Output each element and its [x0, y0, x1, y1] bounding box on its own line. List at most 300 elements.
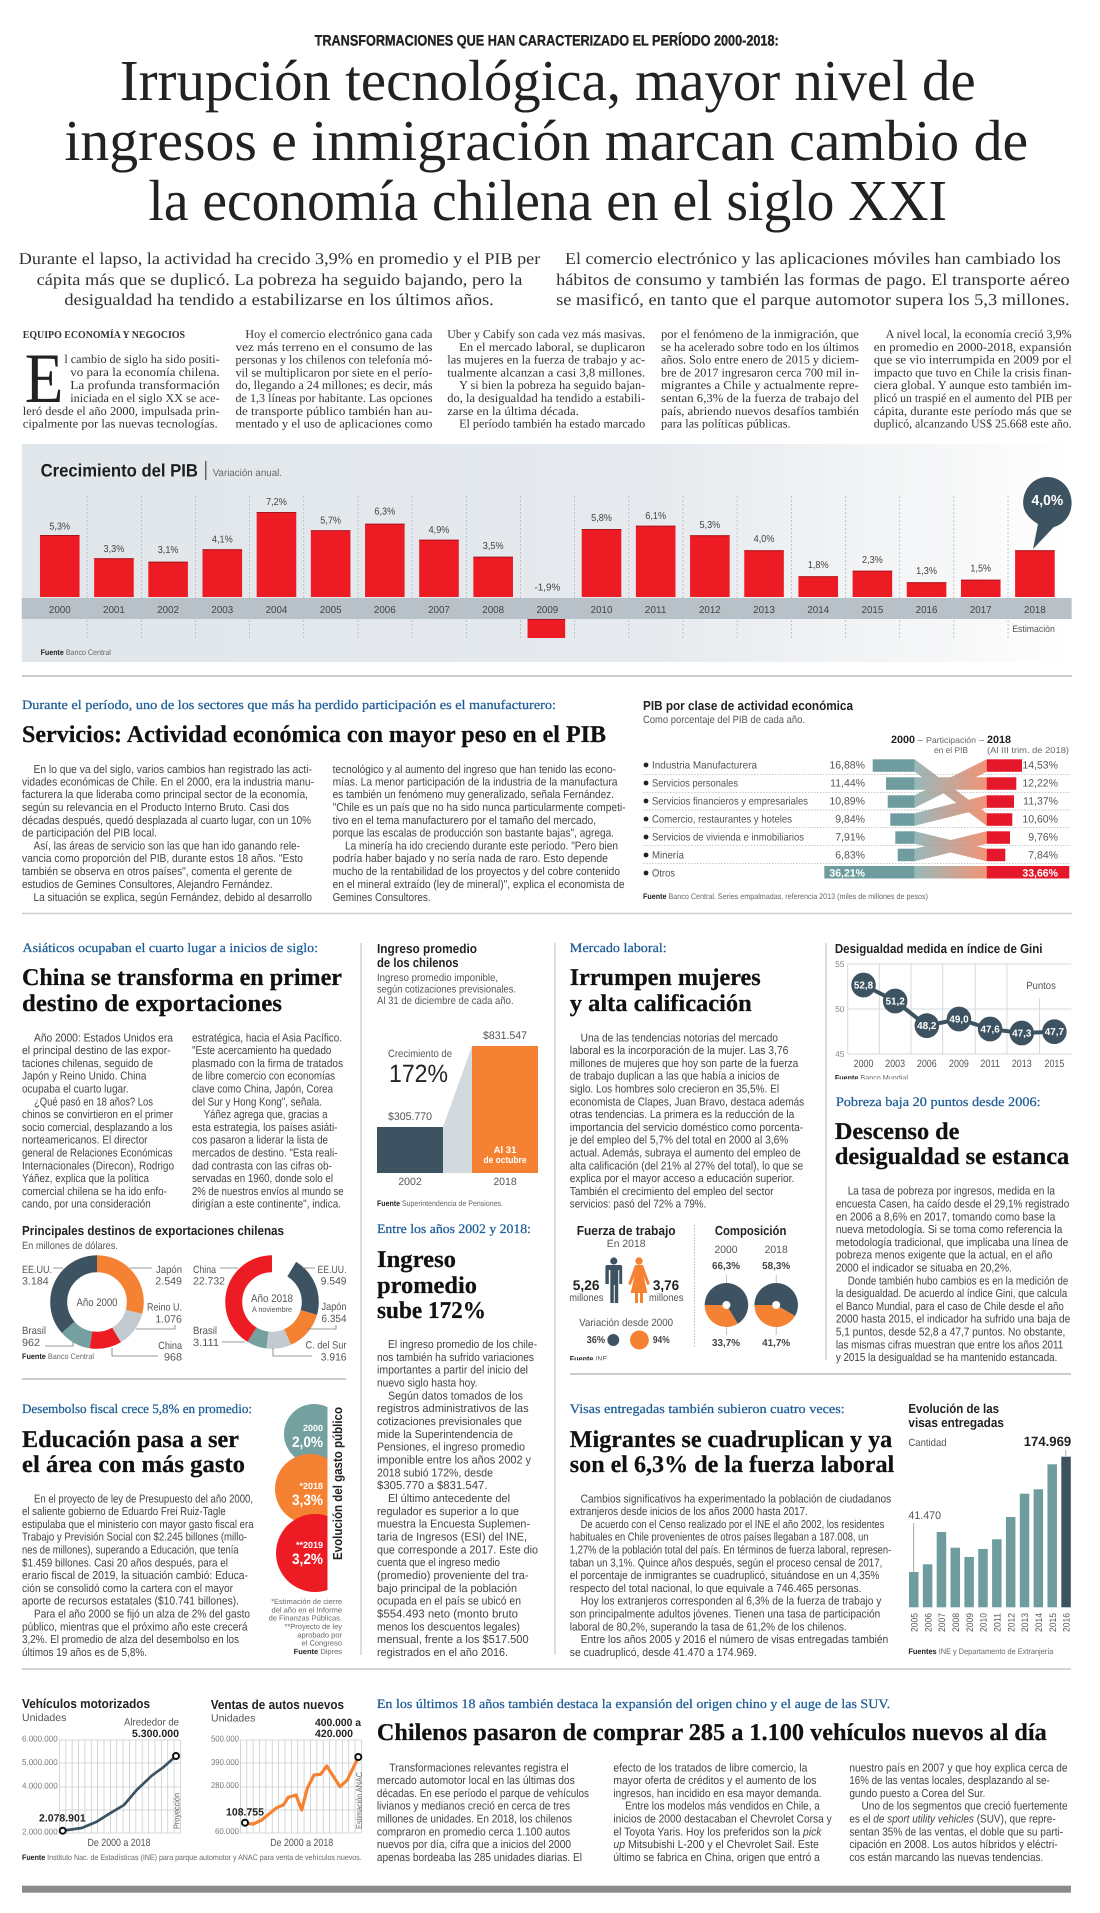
kicker: Mercado laboral:	[570, 940, 667, 955]
max value: 174.969	[1024, 1434, 1071, 1449]
body column 2: 2% de nuestros envíos al mundo se	[192, 1186, 344, 1198]
body column 3: es el de sport utility vehicles (SUV), que repre-	[849, 1814, 1056, 1826]
body: registrados en el año 2016.	[377, 1647, 508, 1659]
year labels: 2011	[645, 605, 667, 616]
body: La tasa de pobreza por ingresos, medida en la	[848, 1186, 1056, 1198]
body left column: La situación se explica, según Fernández, debido al desarrollo	[34, 892, 312, 904]
kicker: Pobreza baja 20 puntos desde 2006:	[836, 1094, 1041, 1109]
body column 2: Entre los modelos más vendidos en Chile, a	[625, 1801, 820, 1813]
heading: Educación pasa a ser	[22, 1427, 239, 1453]
bar value labels: 4,0%	[754, 534, 775, 545]
body left column: de participación del PIB local.	[22, 828, 157, 840]
row labels: Comercio, restaurantes y hoteles	[652, 814, 792, 826]
body: respecto del total nacional, lo que equivale a 746.465 personas.	[570, 1583, 862, 1595]
variation legend: Variación desde 2000	[579, 1317, 673, 1329]
donut 2018 labels: C. del Sur	[306, 1340, 347, 1352]
body: de trabajo duplican a las que había a inicios de	[570, 1071, 779, 1083]
bar value labels: 3,3%	[104, 544, 124, 555]
body: encuesta Casen, ha caído desde el 29,1% registrado	[836, 1198, 1069, 1210]
x axis label: De 2000 a 2018	[270, 1837, 333, 1849]
data values: 47,3	[1012, 1028, 1032, 1040]
column headers: 2000	[891, 734, 915, 746]
panel: labour force pictogram	[565, 1223, 684, 1365]
year labels: 2010	[979, 1613, 990, 1632]
chart title: Crecimiento del PIB	[41, 460, 198, 480]
min value: 41.470	[908, 1510, 941, 1522]
body left column: también se observa en otros países", comenta el gerente de	[22, 866, 292, 878]
main title: ingresos e inmigración marcan cambio de	[64, 108, 1028, 173]
year labels: 2012	[1006, 1613, 1017, 1632]
body: mide la Superintendencia de	[377, 1429, 513, 1441]
body column 1: comercial chilena se ha ido enfo-	[22, 1186, 167, 1198]
body: la desigualdad. De acuerdo al índice Gini, que calcula	[836, 1288, 1068, 1300]
body: nuevo siglo hasta hoy.	[377, 1378, 478, 1390]
body column 2: mercados de destino. "Esta reali-	[192, 1148, 338, 1160]
pie 2000	[705, 1283, 748, 1327]
body left column: Así, las áreas de servicio son las que han ido ganando rele-	[34, 840, 300, 852]
body: estipulaba que el ministerio con mayor gasto fiscal era	[22, 1519, 254, 1531]
chart title: visas entregadas	[908, 1415, 1004, 1430]
bars	[40, 512, 1055, 638]
end markers	[60, 1753, 179, 1834]
body: El último antecedente del	[388, 1493, 510, 1505]
year labels: 2006	[374, 605, 396, 616]
heading: Servicios: Actividad económica con mayor peso en el PIB	[22, 722, 606, 748]
estimate note: Estimación	[1012, 624, 1055, 635]
chart subtitle: según cotizaciones previsionales.	[377, 984, 516, 996]
body column 2: efecto de los tratados de libre comercio, la	[613, 1762, 808, 1774]
footnotes: del año en el Informe	[272, 1605, 342, 1614]
column 3: Uber y Cabify son cada vez más masivas.	[447, 327, 645, 341]
bar value labels: 1,3%	[916, 566, 937, 577]
column 5: impacto que tuvo en Chile la crisis finan-	[874, 365, 1072, 379]
body left column	[22, 764, 314, 904]
kicker: TRANSFORMACIONES QUE HAN CARACTERIZADO EL PERÍODO 2000-2018:	[315, 32, 779, 50]
values: **2019	[296, 1540, 323, 1550]
bar value labels: 3,5%	[483, 541, 504, 552]
pie labels bottom: 33,7%	[712, 1338, 740, 1349]
heading: y alta calificación	[570, 991, 752, 1017]
column 4	[661, 327, 860, 430]
body: registros administrativos de las	[377, 1403, 529, 1415]
donut 2000 labels: China	[158, 1340, 182, 1352]
body: 3,2%. El promedio de alza del desembolso en los	[22, 1634, 239, 1646]
year labels: 2003	[885, 1058, 905, 1070]
body column 3: sentan 35% de las ventas, el doble que su parti-	[849, 1826, 1063, 1838]
body	[377, 1339, 538, 1659]
chart subtitle: Al 31 de diciembre de cada año.	[377, 995, 514, 1007]
source: Fuente Banco Central	[22, 1352, 94, 1361]
bar value labels: 6,1%	[645, 511, 666, 522]
end markers	[242, 1754, 361, 1826]
column 3: En el mercado laboral, se duplicaron	[459, 340, 645, 354]
body column 2: del Sur y Hong Kong", señala.	[192, 1096, 322, 1108]
2018 values: 10,60%	[1022, 814, 1058, 826]
body column 2: dad contrasta con las cifras ob-	[192, 1160, 332, 1172]
body: pobreza menos exigente que la actual, en el año	[836, 1250, 1052, 1262]
end value: 5.300.000	[132, 1728, 179, 1740]
donut 2018 labels: Japón	[322, 1301, 347, 1313]
body right column: mucho de la rentabilidad de los proyectos y del cobre contenido	[333, 866, 620, 878]
row labels: Servicios financieros y empresariales	[652, 796, 808, 808]
panel: motor vehicles line chart	[22, 1696, 182, 1849]
end value: Alrededor de	[124, 1717, 179, 1729]
year labels: 2015	[1045, 1058, 1064, 1070]
bar 2018	[472, 1046, 538, 1173]
panel: public spending semicircles	[268, 1404, 345, 1656]
body column 2: servadas en 1960, donde solo el	[192, 1173, 333, 1185]
callout: 2018 estimate: 4,0%	[1032, 493, 1063, 509]
heading: Migrantes se cuadruplican y ya	[570, 1427, 892, 1453]
body: y 2015 la desigualdad se ha mantenido estancada.	[836, 1352, 1057, 1364]
values: 3,2%	[292, 1551, 323, 1568]
kicker: Asiáticos ocupaban el cuarto lugar a inicios de siglo:	[22, 940, 318, 955]
axis labels	[835, 959, 845, 1059]
bar value labels: 2,3%	[862, 555, 883, 566]
end value: 420.000	[315, 1728, 353, 1740]
body: son principalmente adultos jóvenes. Tienen una tasa de participación	[570, 1608, 880, 1620]
axis labels: 500.000	[211, 1734, 239, 1744]
source: vehicle charts: Fuente Instituto Nac. de Estadísticas (INE) para parque automotor y ANAC para venta de vehículos nuevos.	[22, 1853, 362, 1862]
body column 2	[192, 1032, 344, 1211]
column 3: El período también ha estado marcado	[459, 416, 645, 430]
data values: 48,2	[917, 1021, 937, 1032]
body: nos también ha sufrido variaciones	[377, 1352, 534, 1364]
deck left: Durante el lapso, la actividad ha crecido 3,9% en promedio y el PIB per	[19, 249, 541, 268]
year labels: 2002	[157, 605, 179, 616]
year labels: 2005	[320, 605, 342, 616]
body column 2: ingresos, han incidido en esa mayor demanda.	[613, 1788, 822, 1800]
axis labels: 55	[835, 959, 845, 969]
2018 values	[1022, 760, 1059, 880]
2018 values: 33,66%	[1022, 868, 1059, 880]
body column 2: el Toyota Yaris. Hoy los preferidos son la pick	[613, 1826, 823, 1838]
2018 bars	[987, 759, 1069, 878]
footnotes: de Finanzas Públicas.	[269, 1614, 342, 1623]
column 3: zarse en la última década.	[447, 404, 579, 418]
chart title: Composición	[715, 1223, 786, 1238]
projection note: Proyección	[172, 1793, 182, 1829]
grid	[59, 1740, 181, 1833]
body	[836, 1186, 1070, 1364]
chart subtitle	[377, 972, 516, 1007]
start value: 108.755	[226, 1807, 264, 1819]
panel: Gini line chart	[832, 941, 1071, 1084]
body column 1: millones de unidades. En 2018, los chilenos	[377, 1814, 572, 1826]
column headers: Participación	[926, 735, 976, 745]
body	[569, 1032, 804, 1211]
2018 values: 7,84%	[1028, 850, 1058, 862]
pie labels top	[712, 1244, 790, 1272]
2000 values: 7,91%	[835, 832, 865, 844]
shape: 2000	[284, 1404, 328, 1459]
body left column: según su relevancia en el Producto Interno Bruto. Casi dos	[22, 802, 289, 814]
body column 2: "Este acercamiento ha quedado	[192, 1045, 331, 1057]
body: explica por el mayor acceso a educación superior.	[570, 1173, 794, 1185]
body: el porcentaje de inmigrantes se cuadruplicó, situándose en un 4,35%	[570, 1570, 879, 1582]
panel: labour market article	[569, 940, 804, 1211]
body column 1: nuevos por día, cifra que a inicios del 2000	[377, 1839, 571, 1851]
row labels: Servicios personales	[652, 778, 738, 790]
unit label: Unidades	[211, 1712, 255, 1724]
chart title	[908, 1401, 1004, 1430]
pie labels top: 58,3%	[762, 1261, 790, 1272]
body: economista de Clapes, Juan Bravo, destaca además	[570, 1096, 804, 1108]
footnotes: **Proyecto de ley	[284, 1622, 342, 1631]
column 3: Y si bien la pobreza ha seguido bajan-	[459, 378, 645, 392]
trend line	[864, 985, 1054, 1033]
body left column: décadas después, quedó desplazada al cuarto lugar, con un 10%	[22, 815, 311, 827]
column 5: en promedio en 2000-2018, expansión	[874, 340, 1072, 354]
body: imponible entre los años 2002 y	[377, 1454, 531, 1466]
body column 3: gundo puesto a Corea del Sur.	[849, 1788, 985, 1800]
heading	[22, 1427, 245, 1478]
column 2	[236, 327, 433, 430]
body: millones de mujeres que hoy son parte de la fuerza	[570, 1058, 799, 1070]
chart title: de los chilenos	[377, 955, 459, 970]
chart title: Vehículos motorizados	[22, 1696, 150, 1711]
axis labels: 45	[835, 1049, 845, 1059]
heading: Chilenos pasaron de comprar 285 a 1.100 vehículos nuevos al día	[377, 1720, 1047, 1746]
column 3	[447, 327, 645, 430]
body right column: mías. La menor participación de la industria de la manufactura	[333, 776, 618, 788]
body column 3: 16% de las ventas locales, desplazando al se-	[849, 1775, 1050, 1787]
donut 2000 labels: Reino U.	[147, 1302, 182, 1314]
column 2: Hoy el comercio electrónico gana cada	[245, 327, 433, 341]
panel: China article	[22, 940, 344, 1211]
donut 2018 labels: 22.732	[193, 1276, 225, 1288]
body: De acuerdo con el Censo realizado por el INE el año 2002, los residentes	[581, 1519, 885, 1531]
body	[570, 1493, 891, 1659]
body: $305.770 a $831.547.	[377, 1480, 488, 1492]
bar 2002	[377, 1127, 443, 1173]
chart title: Desigualdad medida en índice de Gini	[835, 941, 1043, 956]
body column 1: livianos y medianos creció en cerca de tres	[377, 1801, 570, 1813]
data values: 49,0	[949, 1014, 969, 1026]
row labels: Industria Manufacturera	[652, 760, 757, 772]
panel: income bar chart	[377, 941, 538, 1208]
year labels	[854, 1058, 1064, 1070]
deck right: El comercio electrónico y las aplicaciones móviles han cambiado los	[565, 249, 1061, 268]
growth callout: Crecimiento de	[388, 1048, 452, 1060]
pie labels top: 66,3%	[712, 1261, 740, 1272]
variation legend	[579, 1317, 673, 1350]
bar value labels: 7,2%	[266, 497, 287, 508]
heading: sube 172%	[377, 1298, 486, 1324]
body: ción se consolidó como la cartera con el mayor	[22, 1583, 233, 1595]
men value: millones	[569, 1292, 603, 1304]
year labels	[49, 605, 1046, 616]
column 4: sentan 6,3% de la fuerza de trabajo del	[661, 391, 860, 405]
year labels: 2002	[398, 1176, 422, 1188]
column 3: las mujeres en la fuerza de trabajo y ac-	[447, 352, 645, 366]
footnotes: el Congreso	[302, 1639, 342, 1648]
body: Cambios significativos ha experimentado la población de ciudadanos	[581, 1493, 891, 1505]
chart title: Ventas de autos nuevos	[211, 1697, 344, 1712]
column 2: vez más terreno en el consumo de las	[236, 340, 433, 354]
body: bajo principal de la población	[377, 1583, 517, 1595]
panel: GDP growth chart	[22, 444, 1072, 662]
row labels: Otros	[652, 868, 675, 880]
heading: Ingreso	[377, 1247, 456, 1273]
donut 2018 labels: 3.111	[193, 1337, 219, 1349]
data points	[851, 973, 1067, 1045]
data values: 51,2	[886, 996, 905, 1008]
body right column: es también un fenómeno muy generalizado, señala Fernández.	[333, 789, 614, 801]
source: Fuente INE	[570, 1354, 607, 1364]
deck left: desigualdad ha tendido a estabilizarse en los últimos años.	[64, 290, 494, 309]
body: Trabajo y Previsión Social con $2.245 billones (millo-	[22, 1532, 247, 1544]
2000 values	[829, 760, 866, 880]
chart title: Fuerza de trabajo	[577, 1223, 676, 1238]
bar value labels: -1,9%	[534, 582, 560, 594]
values: *2018	[299, 1481, 323, 1491]
year labels: 2012	[699, 605, 721, 616]
unit label: Unidades	[22, 1712, 66, 1724]
column 1: l cambio de siglo ha sido positi-	[64, 352, 220, 366]
2000 values: 36,21%	[829, 868, 866, 880]
trend line	[63, 1756, 176, 1831]
year labels: 2011	[980, 1058, 1000, 1070]
year labels: 2006	[923, 1613, 934, 1632]
source: Fuente Banco Mundial	[835, 1074, 908, 1082]
column 5: duplicó, alcanzando US$ 25.668 este año.	[874, 416, 1072, 430]
body right column: podría haber bajado y no sería nada de raro. Esto depende	[333, 853, 608, 865]
icon: woman	[628, 1257, 650, 1303]
column 1: La profunda transformación	[70, 378, 220, 392]
body left column: vancia como proporción del PIB, durante estos 18 años. "Esto	[22, 853, 303, 865]
body: je del empleo del 5,7% del total en 2000 al 3,6%	[569, 1135, 788, 1147]
body: cuenta que el ingreso medio	[377, 1557, 500, 1569]
bar values: $831.547	[483, 1030, 527, 1042]
deck left	[19, 249, 541, 309]
body column 1: Transformaciones relevantes registra el	[389, 1762, 569, 1774]
body: habituales en Chile provenientes de otros países llegaban a 187.008, un	[570, 1532, 868, 1544]
donut 2000 labels: 1.076	[155, 1313, 182, 1325]
body: servicios: pasó del 72% a 79%.	[570, 1199, 706, 1211]
body right column: porque las escalas de producción son bastante bajas", agrega.	[333, 828, 614, 840]
pie labels bottom	[712, 1338, 790, 1349]
body: importantes a partir del inicio del	[377, 1365, 528, 1377]
chart title: Evolución de las	[908, 1401, 999, 1416]
column 4: migrantes a Chile y actualmente repre-	[661, 378, 859, 392]
data values: 52,8	[854, 980, 874, 992]
chart subtitle: Como porcentaje del PIB de cada año.	[643, 714, 805, 726]
donut 2018 labels: Brasil	[193, 1325, 217, 1337]
kicker: Visas entregadas también subieron cuatro veces:	[570, 1401, 845, 1416]
bar note	[484, 1145, 526, 1166]
pie 2018	[754, 1283, 798, 1327]
2018 values: 11,37%	[1023, 796, 1058, 808]
column 3: tualmente alcanzan a casi 3,8 millones.	[447, 365, 645, 379]
shape: 2019	[276, 1514, 328, 1592]
year labels: 2005	[910, 1613, 920, 1632]
body column 2: estratégica, hacia el Asia Pacífico.	[192, 1032, 342, 1044]
body column 2: mayor oferta de créditos y el aumento de los	[613, 1775, 817, 1787]
2000 values: 6,83%	[835, 850, 865, 862]
year labels: 2016	[1062, 1613, 1073, 1632]
column headers: (Al III trim. de 2018)	[987, 745, 1069, 755]
2000 bars	[824, 759, 915, 878]
year labels: 2015	[862, 605, 884, 616]
body: las mismas cifras muestran que entre los años 2011	[836, 1339, 1063, 1351]
men value: 5,26	[573, 1277, 600, 1293]
year labels: 2008	[951, 1613, 962, 1632]
axis labels: 5.000.000	[22, 1757, 58, 1767]
body: el saliente gobierno de Eduardo Frei Ruiz-Tagle	[22, 1506, 226, 1518]
panel: GDP by activity slope chart	[643, 698, 1070, 901]
donut 2000 labels: 2.549	[155, 1276, 182, 1288]
main title: la economía chilena en el siglo XXI	[148, 168, 947, 233]
bar value labels	[49, 497, 991, 594]
year labels: 2003	[211, 605, 234, 616]
column 1: cipalmente por las nuevas tecnologías.	[23, 416, 218, 430]
donut 2018 center label: A noviembre	[252, 1305, 292, 1314]
chart title: PIB por clase de actividad económica	[643, 698, 854, 713]
column 2: de transporte público también han au-	[236, 404, 432, 418]
body: el Banco Mundial, para el caso de Chile desde el año	[836, 1301, 1064, 1313]
body: $554.493 neto (monto bruto	[377, 1608, 518, 1620]
body: Donde también hubo cambios es en la medición de	[848, 1275, 1068, 1287]
body right column: Gemines Consultores.	[333, 892, 431, 904]
variation legend: 36%	[587, 1335, 605, 1346]
heading: China se transforma en primer	[22, 965, 342, 991]
kicker: En los últimos 18 años también destaca la expansión del origen chino y el auge de las SUV.	[377, 1696, 890, 1711]
body: taria de Ingresos (ESI) del INE,	[377, 1532, 527, 1544]
body: menos los descuentos legales)	[377, 1621, 520, 1633]
year labels: 2009	[949, 1058, 969, 1070]
body: alta calificación (del 21% al 27% del total), lo que se	[570, 1160, 803, 1172]
column 5: A nivel local, la economía creció 3,9%	[886, 327, 1072, 341]
women value: 3,76	[653, 1277, 679, 1293]
year labels: 2015	[1048, 1613, 1059, 1632]
callout: 2018 estimate	[1023, 477, 1072, 549]
body left column: facturera la que lideraba como principal sector de la economía,	[22, 789, 308, 801]
body: erario fiscal de 2019, la situación cambió: Educa-	[22, 1570, 248, 1582]
data values	[854, 980, 1064, 1040]
bar value labels: 5,8%	[591, 513, 612, 524]
body: Una de las tendencias notorias del mercado	[581, 1032, 778, 1044]
donut 2000 center label: Año 2000	[76, 1297, 118, 1309]
body column 3	[849, 1762, 1068, 1864]
growth callout: 172%	[389, 1060, 448, 1088]
column 4: país, abriendo nuevos desafíos también	[661, 404, 859, 418]
body right column	[333, 764, 626, 904]
body: que corresponde a 2017. Este dio	[377, 1544, 538, 1556]
year labels	[910, 1613, 1073, 1632]
body: laboral de 80,2%, superando la tasa de 61,2% de los chilenos.	[570, 1621, 847, 1633]
body: se cuadruplicó, desde 41.470 a 174.969.	[570, 1647, 757, 1659]
donut 2000 labels: Brasil	[22, 1325, 46, 1337]
deck left: cápita más que se duplicó. La pobreza ha seguido bajando, pero la	[37, 270, 523, 289]
bar note: de octubre	[484, 1155, 526, 1166]
x axis label: De 2000 a 2018	[88, 1837, 151, 1849]
donut 2018 center label: Año 2018	[251, 1293, 293, 1305]
byline: EQUIPO ECONOMÍA Y NEGOCIOS	[23, 328, 185, 341]
2018 values: 9,76%	[1028, 832, 1058, 844]
bar values	[388, 1030, 527, 1123]
axis labels: 60.000	[215, 1826, 239, 1836]
2000 values: 11,44%	[830, 778, 865, 790]
year labels: 2009	[965, 1613, 976, 1632]
heading	[570, 1427, 895, 1478]
end value	[124, 1717, 179, 1740]
body column 1: compraron en promedio cerca 1.100 autos	[377, 1826, 570, 1838]
values: 2000	[303, 1423, 323, 1433]
2018 values: 12,22%	[1022, 778, 1058, 790]
kicker: Durante el período, uno de los sectores que más ha perdido participación es el manufacturero:	[22, 697, 556, 712]
body: aporte de recursos estatales ($10.741 billones).	[22, 1596, 239, 1608]
